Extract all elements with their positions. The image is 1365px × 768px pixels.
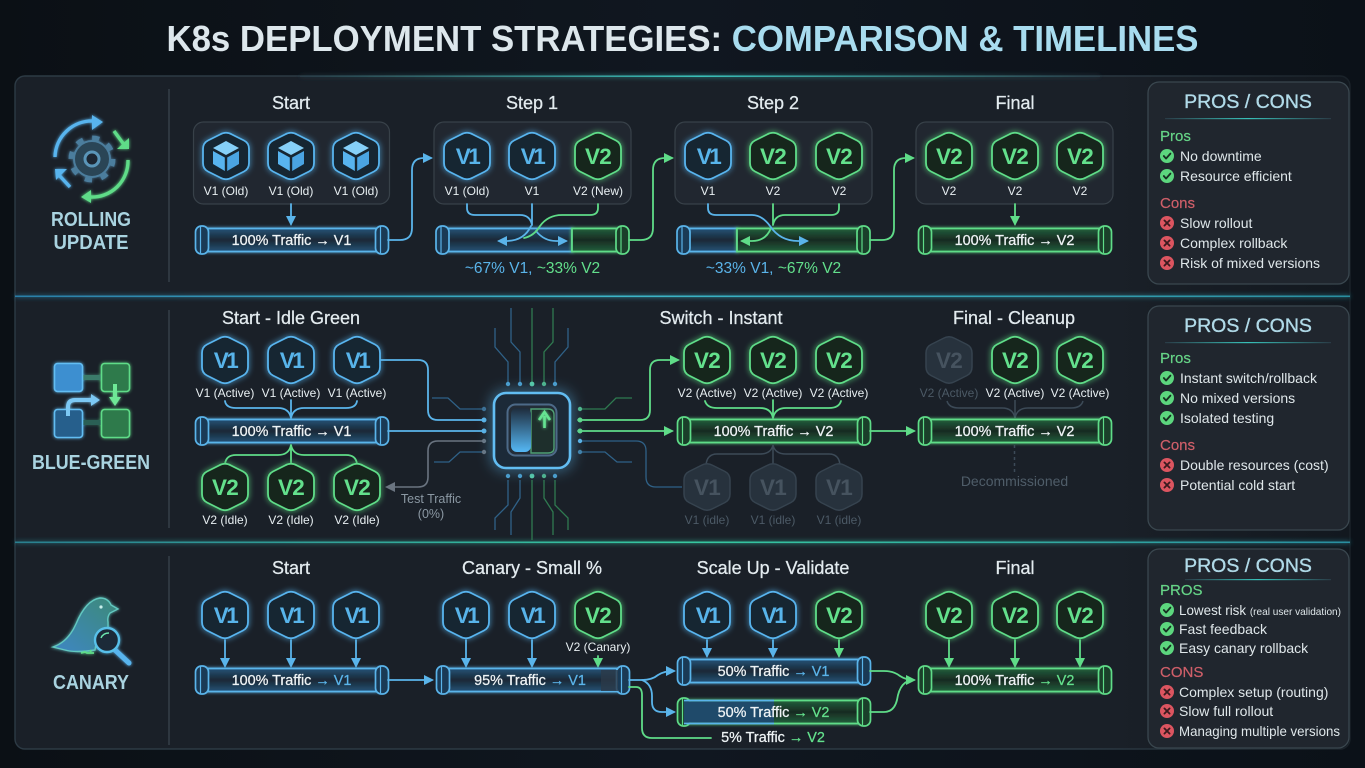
- step: canary small percent: V1: [521, 603, 545, 628]
- step: scale up validate: V1: [696, 603, 720, 628]
- step: canary small percent: V2: [585, 603, 611, 628]
- step: switch instant: V2: [826, 348, 852, 373]
- step: final: V2: [1008, 184, 1023, 198]
- step: canary final: V2: [1067, 603, 1093, 628]
- panel: rolling update pros and cons: Cons: [1160, 195, 1195, 212]
- step: final: [916, 93, 1113, 254]
- panel: canary pros and cons: Managing multiple versions: [1179, 723, 1340, 739]
- arrow: canary start to small percent: [388, 679, 432, 681]
- panel: rolling update pros and cons: Pros: [1160, 128, 1191, 145]
- step 2: [675, 93, 872, 277]
- icon: traffic switch chip: [494, 393, 570, 468]
- step: start idle green: V2: [344, 475, 370, 500]
- panel: canary pros and cons: PROS / CONS: [1184, 555, 1312, 577]
- heading: blue-green: BLUE-GREEN: [32, 452, 150, 474]
- panel: blue-green pros and cons: Cons: [1160, 437, 1195, 454]
- step 1: ~67% V1, ~33% V2: [465, 260, 600, 277]
- step: switch instant: 100% Traffic → V2: [714, 424, 833, 440]
- arrows: canary split: [629, 671, 711, 738]
- heading: rolling update: UPDATE: [54, 232, 128, 254]
- step: switch instant: V1 (idle): [817, 513, 861, 527]
- arrow: step 2 to final: [870, 158, 913, 240]
- step: final cleanup: V2: [1067, 348, 1093, 373]
- step 1: V1: [456, 144, 480, 169]
- step 2: V2: [826, 144, 852, 169]
- panel: rolling update pros and cons: Slow rollout: [1180, 215, 1252, 231]
- panel: blue-green pros and cons: PROS / CONS: [1184, 315, 1312, 337]
- step: canary final: 100% Traffic → V2: [955, 673, 1074, 689]
- step: final: V2: [1002, 144, 1028, 169]
- step: final cleanup: V2 (Active): [1051, 386, 1109, 400]
- step 1: Step 1: [506, 93, 558, 113]
- step: start: V1 (Old): [204, 184, 248, 198]
- step: switch instant: Switch - Instant: [659, 308, 783, 328]
- step 2: V2: [760, 144, 786, 169]
- panel: blue-green pros and cons: Pros: [1160, 350, 1191, 367]
- panel: canary pros and cons: Fast feedback: [1179, 621, 1268, 637]
- panel: blue-green pros and cons: No mixed versions: [1180, 390, 1295, 406]
- step: scale up validate: V1: [762, 603, 786, 628]
- step: canary final: V2: [936, 603, 962, 628]
- step: scale up validate: V2: [826, 603, 852, 628]
- step 1: V2: [585, 144, 611, 169]
- step 1: V1: [521, 144, 545, 169]
- step: switch instant: V1: [826, 475, 852, 500]
- step: start idle green: V2 (Idle): [334, 513, 380, 527]
- step: canary final: [918, 558, 1112, 694]
- step: start idle green: V2: [278, 475, 304, 500]
- step: canary start: [196, 558, 388, 694]
- step: scale up validate: Scale Up - Validate: [697, 558, 849, 578]
- step: final: Final: [995, 93, 1035, 113]
- step: start: [194, 93, 390, 254]
- step: final: V2: [942, 184, 957, 198]
- icon: canary bird with magnifier: [53, 598, 129, 663]
- step: canary start: V1: [280, 603, 304, 628]
- step: final cleanup: V2: [1002, 348, 1028, 373]
- panel: rolling update pros and cons: Risk of mixed versions: [1180, 255, 1320, 271]
- heading: canary: CANARY: [53, 672, 130, 694]
- step: canary start: Start: [272, 558, 310, 578]
- icon: blue-green squares: [54, 364, 130, 438]
- panel: rolling update: [51, 93, 1113, 277]
- step: start: Start: [272, 93, 310, 113]
- step: start idle green: V1: [346, 348, 370, 373]
- step: start idle green: Start - Idle Green: [222, 308, 360, 328]
- arrow: switch to final: [870, 430, 914, 432]
- step: canary start: V1: [345, 603, 369, 628]
- panel: blue-green pros and cons: [1148, 306, 1349, 530]
- trace endpoints: [482, 382, 582, 478]
- arrows: canary merge: [870, 671, 914, 712]
- step 2: V1: [701, 184, 716, 198]
- step: switch instant: V1: [760, 475, 786, 500]
- step: switch instant: V1: [694, 475, 720, 500]
- panel: canary pros and cons: Complex setup (routing): [1179, 684, 1328, 700]
- step: final cleanup: V2 (Active): [986, 386, 1044, 400]
- step 2: V2: [766, 184, 781, 198]
- step: start idle green: 100% Traffic → V1: [232, 424, 351, 440]
- step: final cleanup: Decommissioned: [961, 473, 1068, 489]
- panel: blue-green: [32, 308, 1112, 540]
- step: scale up validate: 50% Traffic → V1: [718, 664, 829, 680]
- label: test traffic: [401, 492, 461, 521]
- panel: canary pros and cons: Slow full rollout: [1179, 703, 1273, 719]
- step: final cleanup: V2 (Active): [920, 386, 978, 400]
- step: switch instant: V2: [694, 348, 720, 373]
- icon: rolling update gear and arrows: [55, 115, 129, 203]
- step: canary start: V1: [214, 603, 238, 628]
- step: canary final: V2: [1002, 603, 1028, 628]
- panel: canary pros and cons: Lowest risk (real user validation): [1179, 602, 1341, 618]
- step 2: V2: [832, 184, 847, 198]
- step: switch instant: V1 (idle): [685, 513, 729, 527]
- step: start idle green: V1 (Active): [328, 386, 386, 400]
- step: start idle green: V2 (Idle): [268, 513, 314, 527]
- step 1: V2 (New): [573, 184, 623, 198]
- step: switch instant: V2 (Active): [810, 386, 868, 400]
- step 2: V1: [697, 144, 721, 169]
- step: final: V2: [1067, 144, 1093, 169]
- step 1: V1 (Old): [445, 184, 489, 198]
- switch traces: [381, 308, 682, 540]
- step: start: 100% Traffic → V1: [232, 233, 351, 249]
- step: start idle green: V2: [212, 475, 238, 500]
- step 2: ~33% V1, ~67% V2: [706, 260, 841, 277]
- step: final cleanup: V2: [936, 348, 962, 373]
- step: canary small percent: Canary - Small %: [462, 558, 602, 578]
- step: final cleanup: Final - Cleanup: [953, 308, 1075, 328]
- step: switch instant: V2 (Active): [678, 386, 736, 400]
- step: canary small percent: [436, 558, 630, 694]
- step: canary small percent: V2 (Canary): [566, 640, 630, 654]
- panel: rolling update pros and cons: Resource efficient: [1180, 168, 1292, 184]
- arrow: start to step 1: [388, 158, 431, 240]
- label: test traffic: Test Traffic: [401, 492, 461, 506]
- step: switch instant: V1 (idle): [751, 513, 795, 527]
- panel: blue-green pros and cons: Instant switch/rollback: [1180, 370, 1318, 386]
- step 2: Step 2: [747, 93, 799, 113]
- step: scale up validate: [678, 558, 870, 746]
- step: start idle green: V1: [214, 348, 238, 373]
- step: final cleanup: 100% Traffic → V2: [955, 424, 1074, 440]
- step: canary final: Final: [995, 558, 1035, 578]
- step: final cleanup: [918, 308, 1112, 489]
- step: switch instant: [659, 308, 870, 527]
- step: scale up validate: 5% Traffic → V2: [721, 730, 825, 746]
- panel: canary pros and cons: [1148, 549, 1349, 748]
- panel: canary pros and cons: CONS: [1160, 664, 1203, 681]
- panel: blue-green pros and cons: Double resources (cost): [1180, 457, 1329, 473]
- step: canary start: 100% Traffic → V1: [232, 673, 351, 689]
- step: start idle green: V1 (Active): [196, 386, 254, 400]
- step 1: V1: [525, 184, 540, 198]
- step 1: [434, 93, 631, 277]
- panel: rolling update pros and cons: No downtime: [1180, 148, 1262, 164]
- panel: canary pros and cons: PROS: [1160, 582, 1203, 599]
- panel: blue-green pros and cons: Isolated testing: [1180, 410, 1274, 426]
- step: canary small percent: 95% Traffic → V1: [474, 673, 586, 689]
- heading: rolling update: ROLLING: [51, 209, 131, 231]
- step: switch instant: V2: [760, 348, 786, 373]
- step: final: V2: [936, 144, 962, 169]
- step: final: 100% Traffic → V2: [955, 233, 1074, 249]
- step: final: V2: [1073, 184, 1088, 198]
- step: start: V1 (Old): [334, 184, 378, 198]
- panel: canary pros and cons: Easy canary rollback: [1179, 640, 1309, 656]
- panel: canary: [53, 558, 1112, 746]
- step: start idle green: V1 (Active): [262, 386, 320, 400]
- panel: blue-green pros and cons: Potential cold start: [1180, 477, 1295, 493]
- panel: rolling update pros and cons: PROS / CONS: [1184, 91, 1312, 113]
- panel: rolling update pros and cons: Complex rollback: [1180, 235, 1288, 251]
- step: start idle green: V1: [280, 348, 304, 373]
- main title: K8s DEPLOYMENT STRATEGIES: COMPARISON & TIMELINES: [166, 18, 1198, 59]
- label: test traffic: (0%): [418, 507, 444, 521]
- step: start idle green: V2 (Idle): [202, 513, 248, 527]
- heading: rolling update: [51, 209, 131, 254]
- arrow: step 1 to step 2: [629, 158, 672, 240]
- panel: rolling update pros and cons: [1148, 82, 1349, 284]
- step: scale up validate: 50% Traffic → V2: [718, 705, 829, 721]
- step: start idle green: [196, 308, 388, 527]
- step: switch instant: V2 (Active): [744, 386, 802, 400]
- step: start: V1 (Old): [269, 184, 313, 198]
- step: canary small percent: V1: [455, 603, 479, 628]
